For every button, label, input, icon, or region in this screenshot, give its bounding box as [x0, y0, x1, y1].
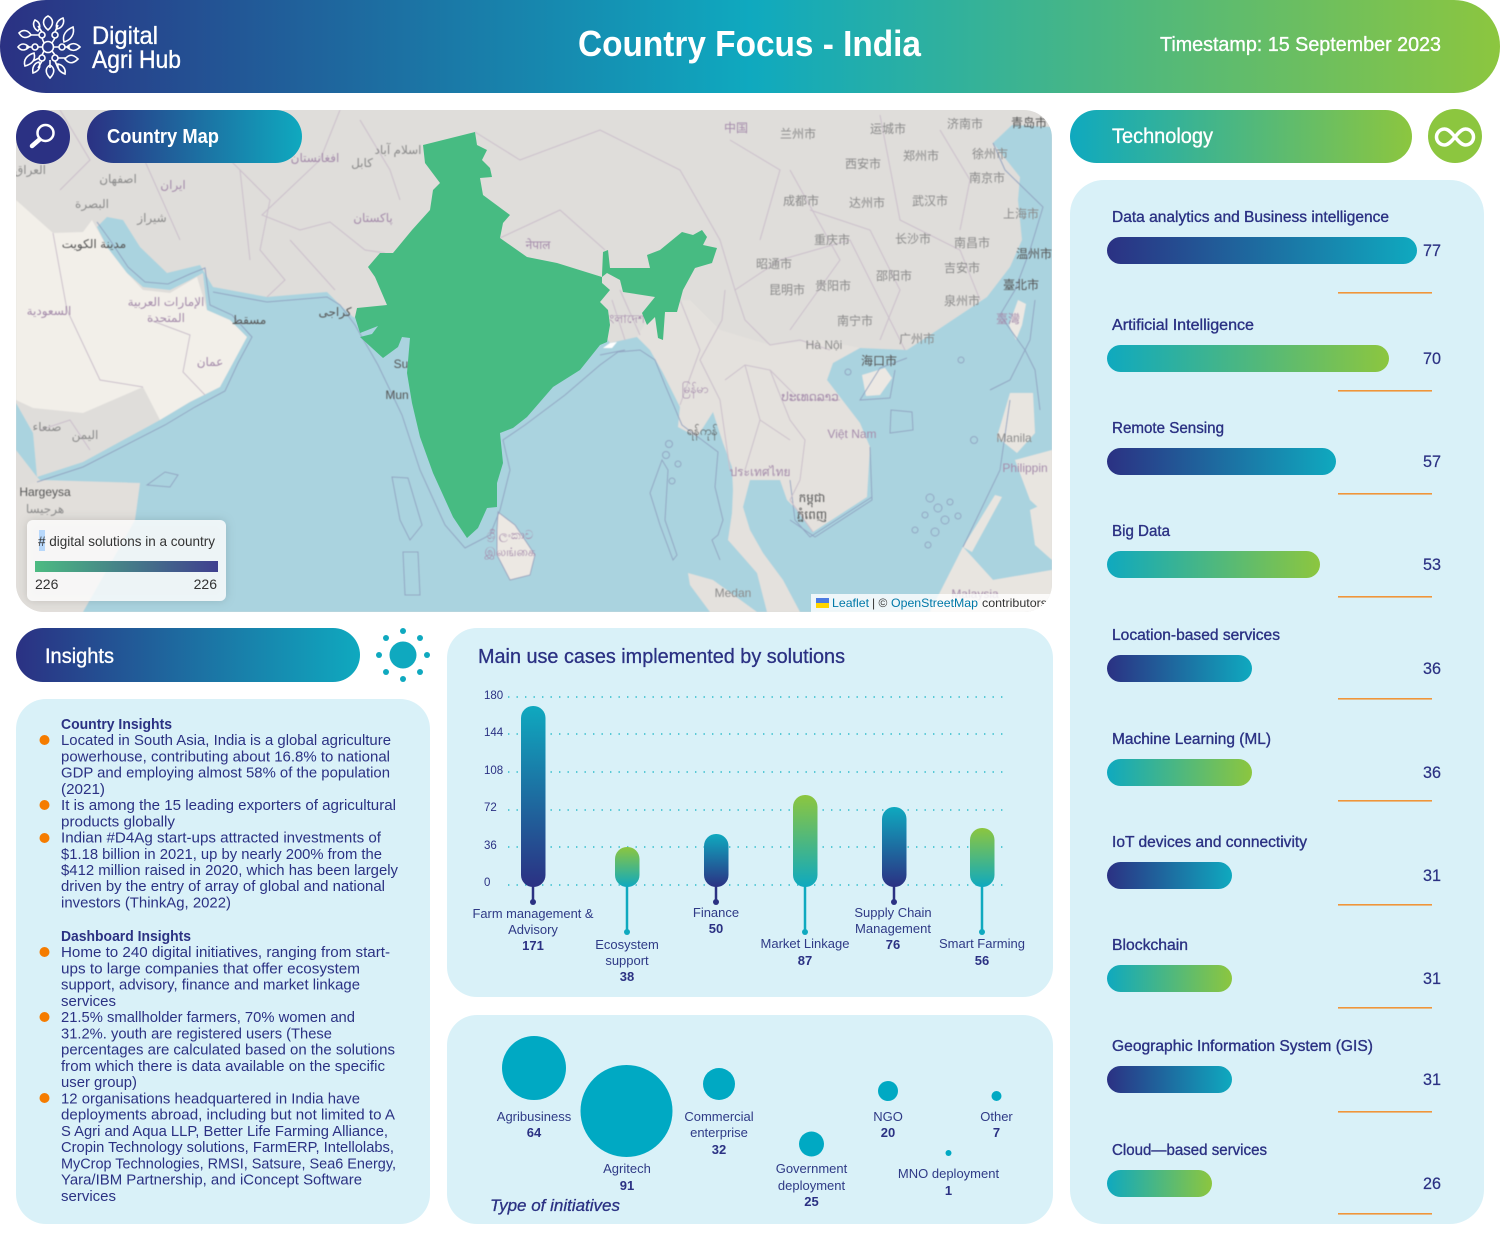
map place labels: ປະເທດລາວ [781, 390, 839, 404]
row: Big Data: 53 [1423, 556, 1441, 574]
bubble: Government deployment: deployment [778, 1178, 845, 1193]
timestamp: Timestamp: 15 September 2023 [1160, 34, 1441, 56]
text: dashboard insights: MyCrop Technologies, RMSI, Satsure, Sea6 Energy, [61, 1156, 396, 1172]
row: Data analytics: 77 [1423, 242, 1441, 260]
map place labels: السعودية [27, 304, 71, 319]
logo wordmark: Agri Hub [92, 46, 181, 74]
map place labels: ရန်ကုန် [686, 423, 718, 441]
bubble: Agribusiness: 64 [527, 1125, 542, 1140]
row: Remote Sensing: 57 [1423, 453, 1441, 471]
bubble: Commercial enterprise: enterprise [690, 1125, 748, 1140]
text: country insights: investors (ThinkAg, 2022) [61, 894, 231, 912]
text: country insights: Located in South Asia, India is a global agriculture [61, 732, 391, 749]
bar: Market Linkage [760, 795, 850, 968]
bar: Smart Farming: Smart Farming [939, 936, 1025, 951]
bubble: Agritech: Agritech [603, 1161, 651, 1176]
map place labels: Philippin [1002, 461, 1048, 475]
row: Cloud-based services [1107, 1142, 1441, 1215]
bubble: MNO deployment [898, 1150, 999, 1198]
row: Remote Sensing: Remote Sensing [1112, 420, 1224, 437]
text: dashboard insights: Dashboard Insights [61, 928, 191, 945]
map place labels: 济南市 [947, 116, 983, 131]
map legend: 226 [194, 576, 217, 592]
bubble: Government deployment [776, 1132, 848, 1209]
bubble: NGO: NGO [873, 1109, 903, 1124]
text: dashboard insights: ups to large companies that offer ecosystem [61, 960, 360, 978]
map place labels: العراق [14, 163, 46, 178]
map place labels: Mun [385, 388, 409, 402]
bubble: Commercial enterprise [684, 1068, 754, 1157]
map place labels: 武汉市 [912, 193, 948, 208]
row: IoT devices: 31 [1423, 867, 1441, 885]
map place labels: عمان [197, 355, 223, 369]
text: dashboard insights: 12 organisations headquartered in India have [61, 1090, 360, 1108]
map place labels: 郑州市 [903, 148, 939, 163]
map attribution: OpenStreetMap [891, 596, 978, 610]
text: dashboard insights [61, 928, 396, 1205]
logo wordmark [92, 22, 181, 74]
bubble: Agritech [580, 1065, 672, 1193]
map place labels: كابل [351, 156, 373, 170]
bullets [40, 735, 50, 1103]
text: country insights: $1.18 billion in 2021, up by nearly 200% from the [61, 846, 382, 863]
row: Artificial Intelligence [1107, 317, 1441, 392]
bar: Market Linkage: 87 [798, 953, 812, 968]
map place labels: Su [394, 357, 408, 371]
map place labels: 青岛市 [1011, 115, 1047, 130]
text: dashboard insights: Home to 240 digital initiatives, ranging from start- [61, 944, 390, 961]
text: country insights: driven by the entry of array of global and national [61, 878, 385, 895]
map place labels: नेपाल [526, 238, 551, 252]
text: country insights: powerhouse, contributing about 16.8% to national [61, 748, 390, 765]
panel: main use cases chart [447, 628, 1053, 997]
map place labels: هرجيسا [26, 502, 64, 517]
row: IoT devices [1107, 834, 1441, 906]
text: country insights [61, 716, 398, 912]
row: Machine Learning [1107, 731, 1441, 802]
y axis labels: 36 [484, 840, 497, 852]
bubble: NGO [873, 1081, 903, 1140]
row: GIS: 31 [1423, 1071, 1441, 1089]
map attribution [811, 594, 1052, 612]
text: dashboard insights: S Agri and Aqua LLP, Better Life Farming Alliance, [61, 1123, 388, 1140]
heading: Country Map: Country Map [107, 126, 219, 148]
text: dashboard insights: percentages are calculated based on the solutions [61, 1042, 395, 1059]
map place labels: 长沙市 [895, 231, 931, 246]
map place labels: Medan [715, 586, 751, 600]
bubble: Government deployment: 25 [804, 1194, 819, 1209]
map place labels: 成都市 [783, 193, 819, 208]
row: Cloud-based services: 26 [1423, 1175, 1441, 1193]
bar: Finance: Finance [693, 905, 739, 920]
map place labels: مسقط [232, 313, 266, 327]
panel: country map [14, 110, 1052, 612]
icon: Digital Agri Hub logo [18, 16, 80, 78]
bar: Smart Farming [939, 828, 1025, 968]
row: Location-based services [1107, 627, 1441, 700]
map place labels: ايران [160, 178, 186, 193]
bar: Farm management & Advisory: Advisory [508, 922, 558, 937]
map place labels: இலங்கை [484, 545, 536, 560]
bubble: MNO deployment: MNO deployment [898, 1166, 999, 1181]
map place labels: البصرة [75, 197, 109, 212]
map place labels: 广州市 [899, 331, 935, 346]
map place labels: 徐州市 [972, 146, 1008, 161]
map attribution: | © [872, 596, 887, 610]
map place labels: Việt Nam [827, 427, 877, 441]
row: IoT devices: IoT devices and connectivity [1112, 834, 1307, 851]
map place labels: ประเทศไทย [729, 465, 791, 479]
bubble: Commercial enterprise: Commercial [684, 1109, 754, 1124]
map place labels: 南京市 [969, 170, 1005, 185]
heading: Country Map [87, 110, 302, 163]
bubble: Agribusiness: Agribusiness [497, 1109, 572, 1124]
map place labels: 达州市 [849, 195, 885, 210]
icon: infinity [1428, 109, 1482, 163]
map place labels: 南宁市 [837, 313, 873, 328]
icon: sun [376, 628, 430, 682]
bubble: Other [980, 1091, 1013, 1140]
chart title: Main use cases implemented by solutions [478, 646, 845, 668]
bubble: Other: Other [980, 1109, 1013, 1124]
map place labels: پاکستان [353, 211, 393, 225]
bar: Smart Farming: 56 [975, 953, 989, 968]
map place labels: اسلام آباد [374, 142, 422, 157]
panel: type of initiatives bubbles [447, 1015, 1053, 1224]
heading: Insights: Insights [45, 645, 114, 668]
row: Location-based services: 36 [1423, 660, 1441, 678]
map place labels: افغانستان [291, 151, 339, 165]
map place labels: 上海市 [1003, 206, 1039, 221]
map place labels [14, 115, 1052, 601]
text: country insights: It is among the 15 leading exporters of agricultural [61, 797, 396, 814]
header banner [0, 0, 1500, 93]
map place labels: မြန်မာ [682, 380, 708, 399]
bar: Market Linkage: Market Linkage [760, 936, 850, 951]
bubble: Agribusiness [497, 1036, 572, 1140]
bar: Finance [693, 834, 739, 936]
map legend: # digital solutions in a country [38, 533, 215, 549]
bar: Supply Chain Management: 76 [886, 937, 900, 952]
map attribution: Leaflet [832, 596, 870, 610]
icon: magnifier [16, 110, 70, 164]
map place labels: 昆明市 [769, 282, 805, 297]
row: Big Data: Big Data [1112, 523, 1170, 540]
row: Blockchain [1107, 937, 1441, 1009]
row: Location-based services: Location-based services [1112, 627, 1280, 644]
chart caption: Type of initiatives [490, 1196, 620, 1215]
text: dashboard insights: Cropin Technology solutions, FarmERP, Intellolabs, [61, 1139, 394, 1156]
map place labels: កម្ពុជា [799, 491, 825, 508]
map place labels: 臺灣 [996, 311, 1020, 326]
map place labels: شيراز [136, 211, 167, 226]
map place labels: المتحدة [147, 311, 185, 325]
bubble: MNO deployment: 1 [945, 1183, 952, 1198]
map place labels: مدينة الكويت [62, 237, 126, 252]
map place labels: الإمارات العربية [128, 295, 204, 310]
row: Blockchain: 31 [1423, 970, 1441, 988]
text: dashboard insights: services [61, 993, 116, 1010]
text: country insights: products globally [61, 813, 175, 830]
y axis labels: 72 [484, 802, 497, 814]
bar: Ecosystem support [595, 847, 659, 984]
map place labels: اصفهان [99, 172, 137, 186]
text: dashboard insights: user group) [61, 1074, 137, 1091]
map place labels: 臺北市 [1003, 277, 1039, 292]
heading: Technology: Technology [1112, 125, 1213, 148]
bar: Farm management & Advisory: 171 [522, 938, 544, 953]
bubble: Agritech: 91 [620, 1178, 634, 1193]
y axis labels: 144 [484, 727, 504, 739]
map place labels: 重庆市 [814, 232, 850, 247]
row: Big Data [1107, 523, 1441, 598]
row: Machine Learning: Machine Learning (ML) [1112, 731, 1271, 748]
y axis labels: 180 [484, 690, 503, 702]
row: Blockchain: Blockchain [1112, 937, 1188, 954]
row: Remote Sensing [1107, 420, 1441, 495]
map place labels: ශ්‍රී ලංකාව [486, 528, 534, 543]
map legend: 226 [35, 576, 59, 592]
row: GIS: Geographic Information System (GIS) [1112, 1038, 1373, 1055]
bubble: NGO: 20 [881, 1125, 895, 1140]
row: Cloud-based services: Cloud—based services [1112, 1142, 1267, 1159]
map place labels: Hà Nội [806, 338, 842, 352]
shape: India highlighted country [355, 132, 717, 538]
row: Data analytics: Data analytics and Business intelligence [1112, 209, 1389, 226]
bar: Ecosystem support: support [605, 953, 649, 968]
y axis labels: 108 [484, 765, 503, 777]
text: dashboard insights: 21.5% smallholder farmers, 70% women and [61, 1009, 355, 1026]
row: GIS [1107, 1038, 1441, 1113]
heading: Insights [16, 628, 360, 682]
y axis labels: 0 [484, 877, 490, 889]
row: Machine Learning: 36 [1423, 764, 1441, 782]
text: dashboard insights: deployments abroad, including but not limited to A [61, 1107, 395, 1124]
text: dashboard insights: 31.2%. youth are registered users (These [61, 1026, 332, 1042]
map place labels: 南昌市 [954, 235, 990, 250]
heading: Technology [1070, 110, 1412, 163]
text: country insights: (2021) [61, 781, 105, 798]
title: Country Focus - India [578, 23, 922, 64]
map place labels: 邵阳市 [876, 268, 912, 283]
text: country insights: $412 million raised in 2020, which has been largely [61, 862, 398, 879]
map place labels: Malaysia [951, 587, 999, 601]
map place labels: Hargeysa [19, 485, 71, 499]
map place labels: Manila [996, 431, 1032, 445]
logo wordmark: Digital [92, 22, 158, 50]
row: Data analytics [1107, 209, 1441, 294]
bubble: Other: 7 [993, 1125, 1000, 1140]
text: dashboard insights: from which there is data available on the specific [61, 1058, 385, 1075]
map place labels: 贵阳市 [815, 278, 851, 293]
bar: Supply Chain Management: Supply Chain [854, 905, 932, 920]
bar: Finance: 50 [709, 921, 723, 936]
text: country insights: Country Insights [61, 716, 172, 733]
map place labels: 吉安市 [944, 260, 980, 275]
bar: Supply Chain Management: Management [855, 921, 931, 936]
map place labels: صنعاء [33, 420, 61, 434]
map place labels: 泉州市 [944, 293, 980, 308]
bar: Ecosystem support: Ecosystem [595, 937, 659, 952]
bar: Ecosystem support: 38 [620, 969, 634, 984]
map place labels: 西安市 [845, 156, 881, 171]
row: Artificial Intelligence: 70 [1423, 350, 1441, 368]
map place labels: 海口市 [861, 353, 897, 368]
text: dashboard insights: support, advisory, finance and market linkage [61, 977, 360, 994]
map place labels: বাংলাদেশ [598, 312, 646, 326]
map place labels: ភ្នំពេញ [797, 507, 827, 522]
map place labels: اليمن [72, 428, 98, 443]
text: dashboard insights: Yara/IBM Partnership, and iConcept Software [61, 1172, 362, 1189]
bar: Farm management & Advisory: Farm management & [472, 906, 594, 921]
map place labels: كراجى [318, 305, 352, 320]
text: dashboard insights: services [61, 1188, 116, 1205]
bubble: Commercial enterprise: 32 [712, 1142, 726, 1157]
map place labels: 中国 [724, 120, 748, 135]
bubble: Government deployment: Government [776, 1161, 848, 1176]
row: Artificial Intelligence: Artificial Intelligence [1112, 317, 1254, 334]
map attribution: contributors [982, 596, 1047, 610]
map legend [27, 520, 226, 601]
bar: Supply Chain Management [854, 807, 932, 952]
map place labels: 运城市 [870, 121, 906, 136]
text: country insights: Indian #D4Ag start-ups attracted investments of [61, 830, 382, 847]
panel: technology [1070, 180, 1484, 1224]
y axis labels [484, 690, 504, 889]
map place labels: 昭通市 [756, 256, 792, 271]
panel: insights [16, 699, 430, 1224]
map place labels: 兰州市 [780, 126, 816, 141]
text: country insights: GDP and employing almost 58% of the population [61, 765, 390, 782]
map place labels: 温州市 [1016, 246, 1052, 261]
bar: Farm management & Advisory [472, 706, 594, 953]
